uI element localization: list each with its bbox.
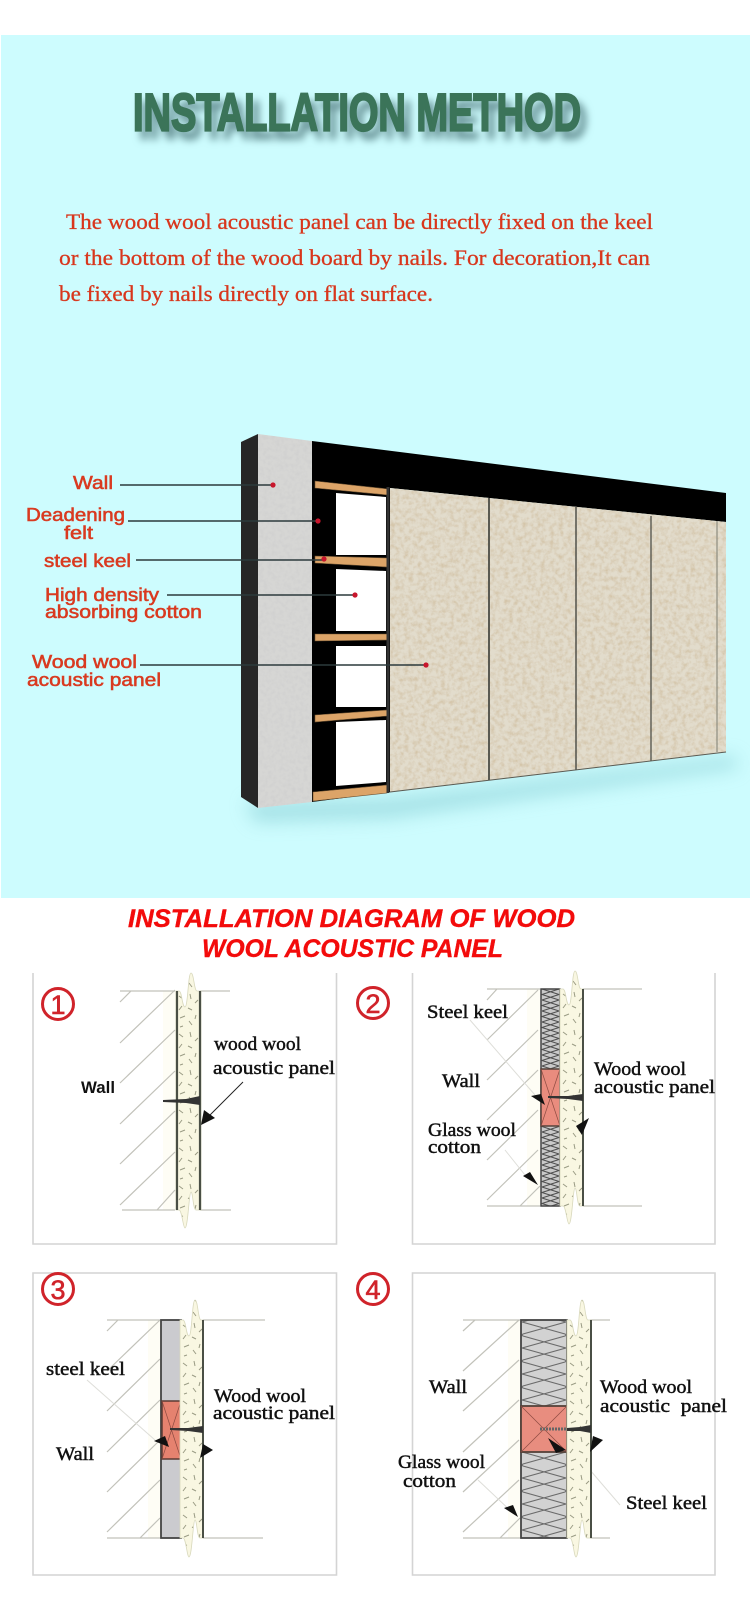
text block: description (59, 209, 653, 306)
labels: Wood wool (214, 1387, 306, 1407)
title: INSTALLATION METHOD (133, 84, 581, 142)
callout: deadening felt: felt (64, 522, 93, 543)
labels: acoustic panel (600, 1397, 727, 1417)
wood wool panel (560, 971, 583, 1224)
heading: installation diagram: WOOL ACOUSTIC PANEL (202, 935, 503, 963)
drop shadow under wall (245, 756, 738, 822)
labels: Wood wool (594, 1060, 686, 1080)
pale band beside wall (163, 991, 176, 1210)
labels: acoustic panel (213, 1404, 335, 1424)
label: wood wool acoustic panel: acoustic panel (213, 1059, 335, 1079)
labels (427, 1003, 715, 1158)
wood wool panel (176, 973, 201, 1228)
number 3 (42, 1274, 74, 1305)
screw (163, 1096, 200, 1105)
labels: Glass wool (428, 1121, 516, 1141)
callout: deadening felt: Deadening (26, 504, 125, 525)
callout: steel keel: steel keel (44, 550, 131, 571)
number 4: 4 (365, 1275, 381, 1305)
callout: wall: Wall (73, 472, 113, 493)
number 1 (42, 988, 74, 1020)
steel keel block (521, 1406, 567, 1452)
wood wool acoustic panels (390, 488, 726, 792)
callout: steel keel (44, 550, 327, 571)
callout: high density absorbing cotton: absorbing cotton (45, 601, 202, 622)
callout: wall (73, 472, 276, 493)
number 2: 2 (365, 989, 381, 1019)
text block: description: be fixed by nails directly on flat surface. (59, 281, 433, 306)
faint leader lines (478, 1470, 620, 1515)
number 2 (358, 988, 388, 1019)
callout: high density absorbing cotton (45, 584, 358, 622)
arrowheads (523, 1094, 589, 1185)
screw (170, 1426, 203, 1433)
panel seams (388, 487, 726, 793)
glass wool cotton (521, 1320, 567, 1538)
panel: diagram 3 (33, 1273, 336, 1575)
panel: diagram 4 (358, 1273, 727, 1575)
number 3: 3 (50, 1275, 66, 1305)
label: wood wool acoustic panel: wood wool (214, 1035, 301, 1055)
labels: Wall (429, 1378, 467, 1398)
text block: description: The wood wool acoustic panel can be directly fixed on the keel (66, 209, 653, 234)
callout: wood wool acoustic panel (27, 651, 429, 690)
callout: high density absorbing cotton: High density (45, 584, 160, 605)
steel keel block (541, 1069, 560, 1126)
arrowheads (154, 1436, 213, 1458)
labels (398, 1378, 727, 1514)
labels (46, 1360, 335, 1465)
labels: Glass wool (398, 1453, 485, 1473)
frame 1 (33, 973, 336, 1244)
frame 3 (33, 1273, 336, 1575)
panel: cyan installation method section (1, 35, 750, 898)
number 4 (358, 1274, 388, 1305)
callout: wood wool acoustic panel: acoustic panel (27, 669, 161, 690)
concrete wall face (258, 434, 312, 808)
labels: Wood wool (600, 1378, 692, 1398)
frame 4 (412, 1273, 715, 1575)
text block: description: or the bottom of the wood board by nails. For decoration,It can (59, 245, 650, 270)
labels: Wall (56, 1445, 94, 1465)
faint leader lines (470, 1020, 535, 1175)
wood wool panel (180, 1300, 203, 1557)
arrowheads (504, 1436, 603, 1517)
screw (540, 1425, 591, 1433)
labels: cotton (428, 1138, 481, 1158)
callouts for wall layers (26, 472, 429, 690)
panel: diagram 2 (358, 971, 715, 1244)
steel keel strips (313, 481, 388, 801)
callout: wood wool acoustic panel: Wood wool (32, 651, 137, 672)
steel keel cavity (161, 1320, 181, 1538)
wall construction illustration (241, 434, 738, 822)
screw (548, 1094, 583, 1101)
high density absorbing cotton blocks (336, 493, 386, 786)
wall hatching (487, 989, 642, 1206)
panel: diagram 1 (33, 973, 336, 1244)
labels: Wall (442, 1072, 480, 1092)
steel keel block (162, 1401, 181, 1459)
wall hatching (107, 1320, 265, 1538)
label: wood wool acoustic panel (213, 1035, 335, 1079)
labels: acoustic panel (594, 1078, 715, 1098)
wall hatching (120, 990, 231, 1210)
faint leader line (87, 1380, 155, 1440)
glass wool cotton (541, 989, 560, 1206)
dark side of wall (241, 434, 258, 808)
wall hatching (463, 1320, 610, 1538)
pale band beside wall (527, 989, 540, 1206)
number 1: 1 (50, 990, 66, 1020)
wood wool panel (567, 1300, 591, 1557)
labels: steel keel (46, 1360, 125, 1380)
pale band beside wall (508, 1320, 521, 1538)
labels: Steel keel (427, 1003, 508, 1023)
labels: Steel keel (626, 1494, 707, 1514)
heading: installation diagram: INSTALLATION DIAGRAM OF WOOD (128, 905, 575, 933)
label: wall: Wall (81, 1079, 115, 1097)
frame 2 (412, 973, 715, 1244)
heading: installation diagram (128, 905, 575, 963)
arrow to panel (201, 1082, 243, 1125)
deadening felt black layer (312, 441, 726, 802)
pale band beside wall (148, 1320, 161, 1538)
callout: deadening felt (26, 504, 321, 543)
labels: cotton (403, 1472, 456, 1492)
